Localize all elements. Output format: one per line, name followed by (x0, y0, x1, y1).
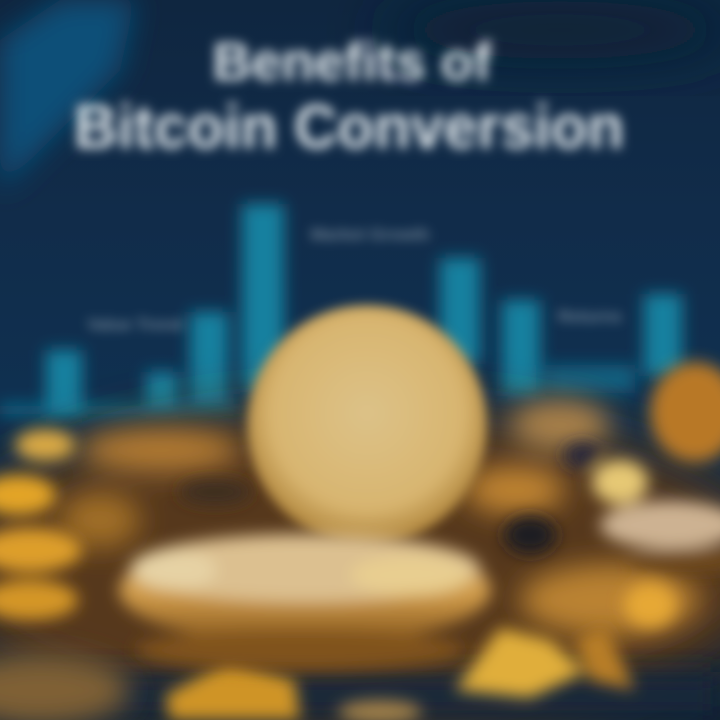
bottom nuggets (165, 625, 635, 720)
gold pile (0, 362, 720, 720)
right stacks (465, 399, 700, 636)
bar 7 (545, 365, 635, 393)
bar 5 (440, 258, 480, 364)
chart captions (87, 225, 622, 334)
bar 8 (644, 294, 682, 376)
title: Bitcoin Conversion (74, 93, 624, 162)
coin dish (119, 534, 491, 670)
bar chart (0, 204, 682, 418)
title (74, 32, 624, 162)
left stacks (0, 428, 240, 720)
bar 4 (242, 204, 284, 392)
chart captions: Market Growth (310, 225, 430, 244)
chart captions: Value Trend (87, 315, 183, 334)
baseline glow (0, 404, 240, 416)
bar 3 (190, 312, 228, 404)
bar 6 (502, 300, 540, 396)
bar 1 (46, 350, 82, 418)
title: Benefits of (212, 32, 493, 92)
chart captions: Returns (558, 307, 622, 326)
bar 2 (146, 372, 178, 410)
central coin (247, 305, 487, 545)
